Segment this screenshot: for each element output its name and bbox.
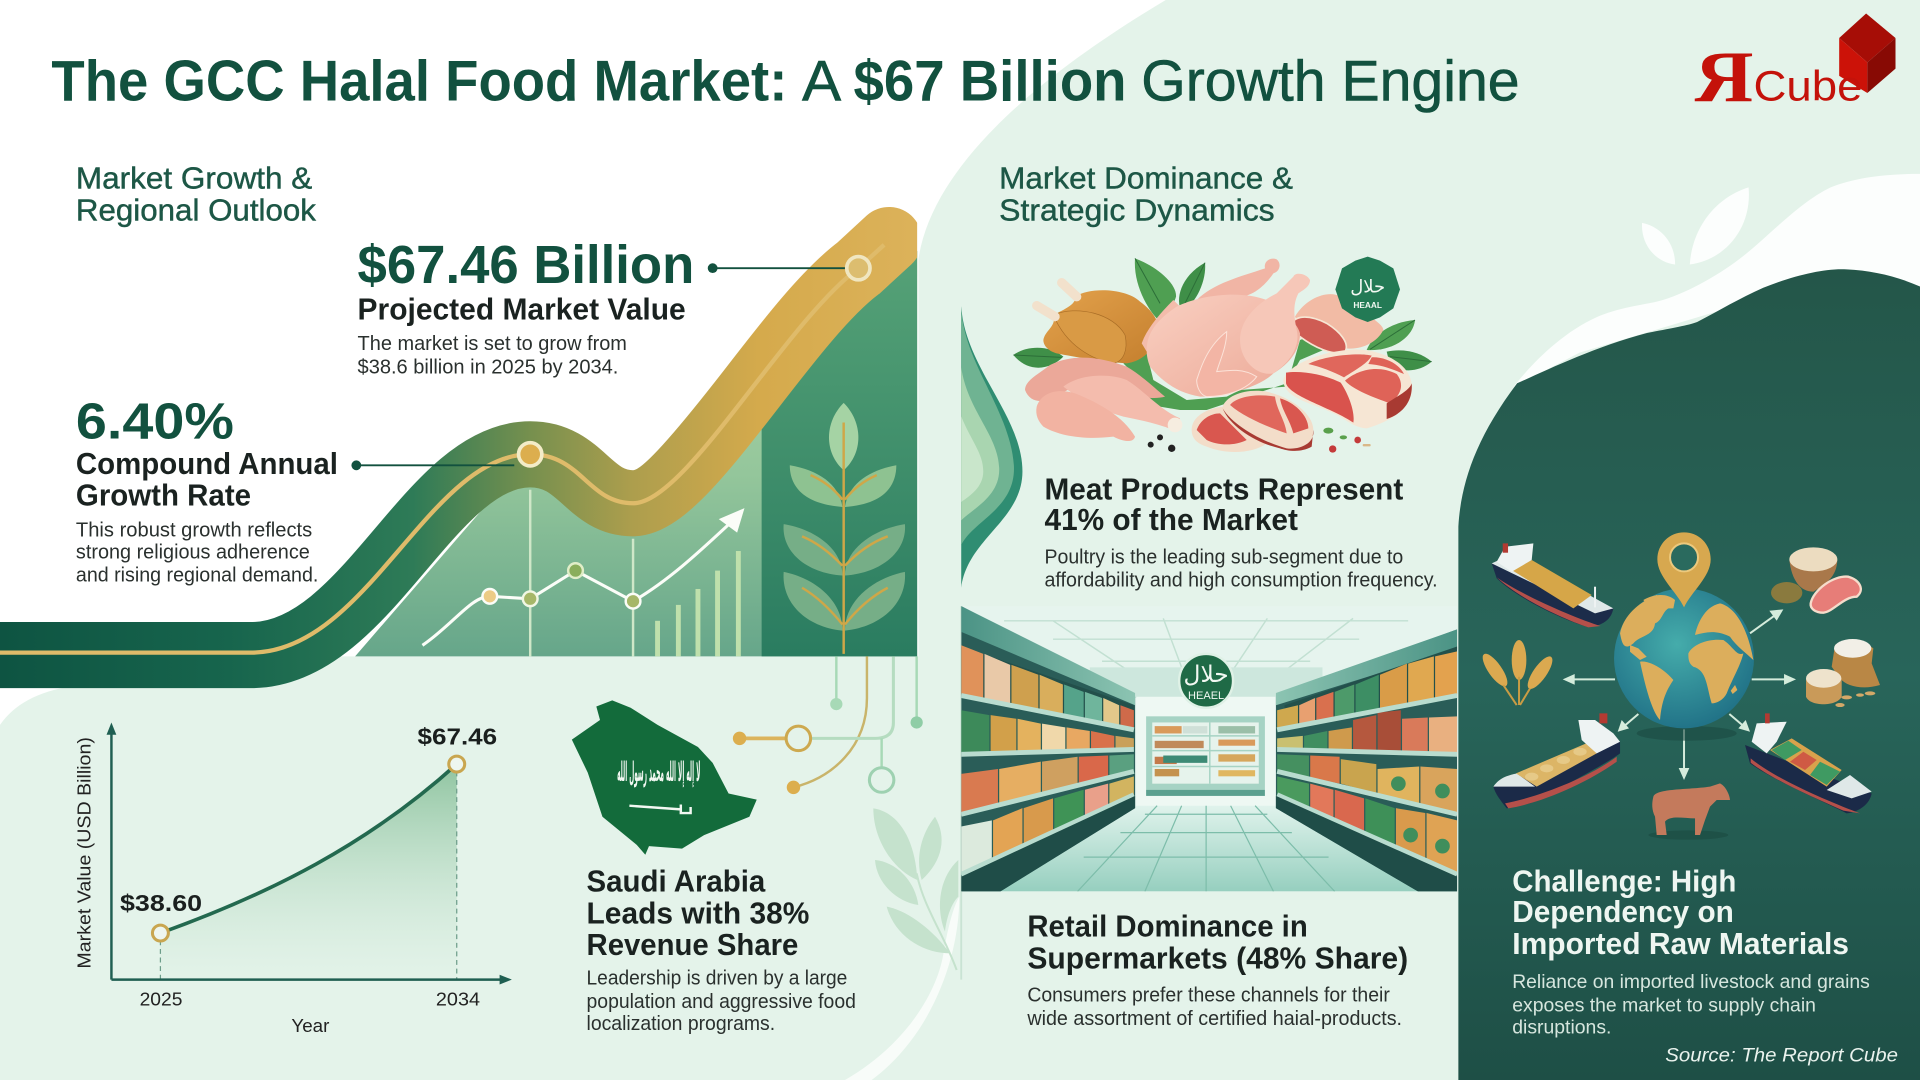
panel: challenge — [1458, 269, 1920, 1080]
callout: 67.46 billion: The market is set to grow from — [358, 333, 627, 355]
text: Saudi Arabia: Revenue Share — [587, 928, 798, 962]
callout: 67.46 billion: $67.46 Billion — [358, 235, 694, 295]
illustration: supermarket aisle: حلال — [1184, 661, 1229, 688]
heading: market growth: Market Growth & — [76, 162, 312, 196]
text: retail dominance: wide assortment of certified haial-products. — [1026, 1008, 1402, 1030]
decorative white curve and sprig — [845, 808, 959, 1080]
illustration: supermarket aisle — [961, 606, 1457, 891]
callout: CAGR: Compound Annual — [76, 447, 338, 481]
logo: RCube — [1695, 13, 1896, 118]
illustration: halal meat: HEAAL — [1353, 300, 1382, 310]
text: challenge — [1512, 864, 1870, 1038]
left shelf unit — [961, 606, 1135, 891]
text: meat products: 41% of the Market — [1044, 503, 1298, 537]
heading: market growth — [76, 162, 317, 227]
line chart: 2025 — [140, 988, 182, 1009]
title: The GCC Halal Food Market: — [51, 49, 787, 113]
illustration: halal meat: حلال — [1350, 277, 1385, 298]
title: $67 Billion — [853, 49, 1127, 113]
text: Saudi Arabia: Leads with 38% — [587, 896, 809, 930]
heading: market dominance: Strategic Dynamics — [999, 193, 1275, 227]
source note: Source: The Report Cube — [1665, 1045, 1898, 1067]
heading: market dominance: Market Dominance & — [999, 162, 1293, 196]
callout: 67.46 billion — [358, 235, 870, 378]
text: meat products: Poultry is the leading sub-segment due to — [1044, 546, 1403, 568]
decorative green wave between columns — [961, 306, 1022, 980]
icon: grain bowl and meat — [1771, 547, 1861, 613]
line chart: Market Value (USD Billion) — [74, 737, 95, 969]
icon: globe with pin — [1614, 532, 1754, 741]
icon: cow — [1648, 783, 1730, 840]
icon: cargo ship lower right — [1745, 713, 1872, 813]
illustration: supermarket aisle: HEAEL — [1188, 690, 1224, 702]
line chart: 2034 — [436, 988, 480, 1009]
white swoosh and leaves behind challenge panel — [1513, 174, 1920, 387]
icon: grain sacks — [1806, 639, 1880, 707]
text: challenge: Reliance on imported livestock and grains — [1512, 971, 1870, 993]
icon: plant — [784, 403, 905, 654]
line chart — [74, 722, 512, 1036]
callout: CAGR — [76, 391, 542, 587]
icon: arrows — [1563, 609, 1796, 780]
text: challenge: Dependency on — [1512, 895, 1734, 929]
icon: cargo ship top left — [1492, 543, 1613, 627]
growth area chart with ribbon — [0, 240, 917, 656]
icon: cargo ship lower left — [1493, 713, 1620, 808]
callout: 67.46 billion: Projected Market Value — [358, 293, 686, 327]
text: meat products — [1044, 473, 1438, 592]
connector lines — [733, 656, 923, 794]
icon: Saudi Arabia map — [572, 700, 757, 855]
line chart: $38.60 — [120, 890, 202, 916]
callout: CAGR: Growth Rate — [76, 479, 251, 513]
supply chain illustration — [1478, 532, 1880, 840]
line chart: Year — [291, 1015, 329, 1036]
back cooler — [1146, 716, 1265, 796]
callout: CAGR: 6.40% — [76, 391, 234, 449]
title: Growth Engine — [1141, 49, 1520, 113]
text: challenge: Imported Raw Materials — [1512, 927, 1849, 961]
text: challenge: exposes the market to supply chain — [1512, 994, 1816, 1016]
title: A — [802, 49, 842, 113]
icon: wheat — [1478, 640, 1557, 705]
heading: market dominance — [999, 162, 1293, 227]
text: meat products: affordability and high consumption frequency. — [1044, 570, 1438, 592]
callout: CAGR: This robust growth reflects — [76, 519, 312, 541]
text: retail dominance: Retail Dominance in — [1027, 910, 1308, 944]
logo: RCube: Cube — [1753, 62, 1862, 110]
right shelf unit — [1276, 629, 1457, 891]
text: Saudi Arabia: Saudi Arabia — [587, 864, 766, 898]
callout: CAGR: and rising regional demand. — [76, 565, 318, 587]
logo: RCube: Я — [1695, 37, 1753, 118]
text: retail dominance: Supermarkets (48% Share) — [1027, 942, 1408, 976]
line chart: $67.46 — [418, 723, 497, 749]
text: Saudi Arabia: population and aggressive food — [587, 991, 856, 1013]
text: Saudi Arabia — [587, 864, 856, 1035]
illustration: halal meat — [1013, 257, 1432, 453]
text: retail dominance: Consumers prefer these channels for their — [1027, 985, 1390, 1007]
heading: market growth: Regional Outlook — [76, 193, 317, 227]
text: challenge: Challenge: High — [1512, 864, 1736, 898]
text: retail dominance — [1026, 910, 1408, 1030]
text: challenge: disruptions. — [1512, 1016, 1611, 1038]
text: لا إله إلا الله محمد رسول الله — [617, 757, 700, 788]
title — [51, 49, 1520, 113]
callout: 67.46 billion: $38.6 billion in 2025 by 2034. — [358, 356, 618, 378]
text: Saudi Arabia: Leadership is driven by a large — [587, 967, 847, 989]
callout: CAGR: strong religious adherence — [76, 541, 310, 563]
text: meat products: Meat Products Represent — [1044, 473, 1403, 507]
text: Saudi Arabia: localization programs. — [587, 1013, 775, 1035]
